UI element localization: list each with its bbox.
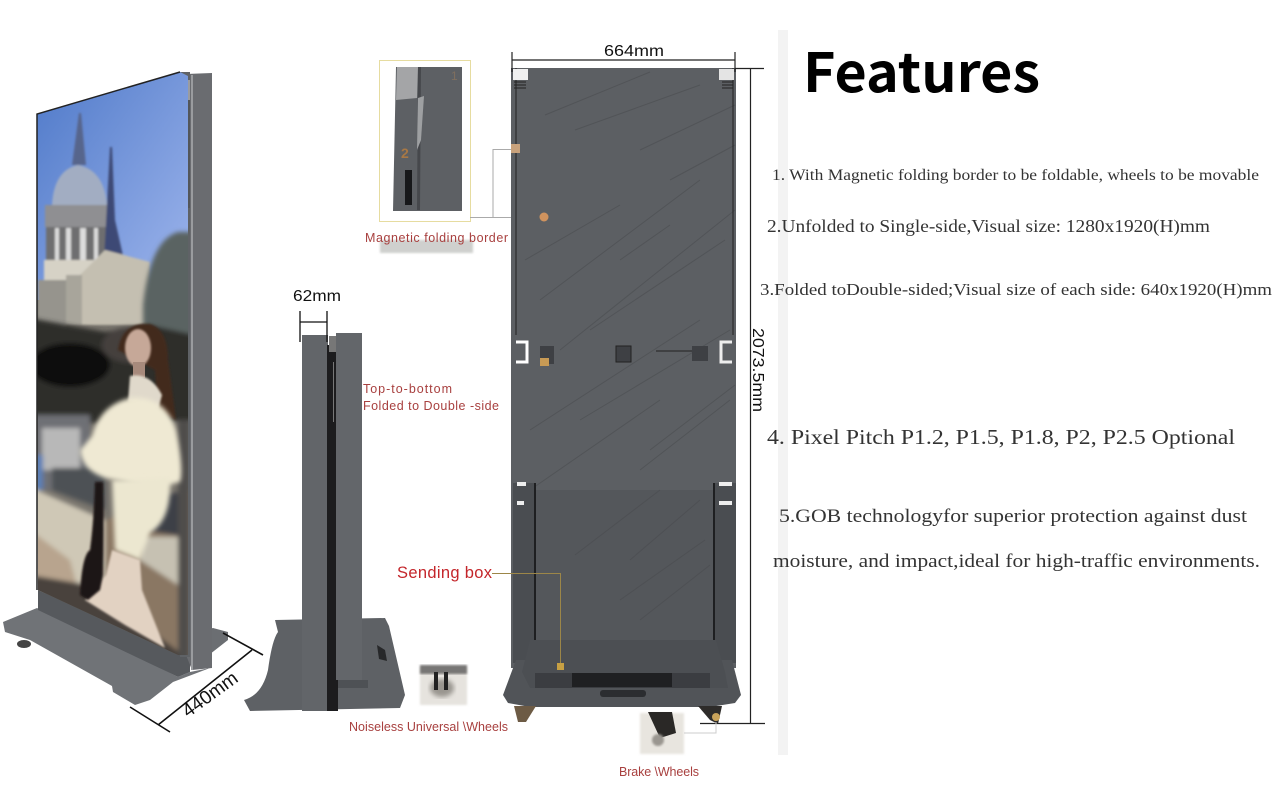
image: woman in fur coat — [80, 324, 181, 648]
image: cathedral — [38, 113, 150, 330]
lower recess — [535, 490, 715, 640]
dimension: 664mm — [512, 43, 735, 72]
title: Features — [803, 29, 1040, 108]
corner brackets — [513, 69, 734, 503]
side rear column — [302, 335, 328, 711]
side black strip — [327, 345, 338, 711]
rear brushed streaks — [525, 72, 735, 620]
label: folded — [363, 382, 499, 413]
side base — [244, 618, 405, 711]
left wheel — [514, 706, 536, 722]
connector lines — [470, 150, 544, 218]
screen edge — [37, 72, 180, 590]
side front column — [336, 333, 362, 680]
dimension: 2073.5mm: 2073.5mm — [749, 328, 766, 412]
base handle — [600, 690, 646, 697]
rear base — [503, 660, 741, 707]
inset: magnetic folding border: 2 — [401, 145, 409, 161]
inset: brake wheel — [640, 712, 716, 754]
label: folded: Folded to Double -side — [363, 399, 499, 413]
product: side view — [244, 288, 508, 734]
label: folded: Top-to-bottom — [363, 382, 452, 396]
screen image — [30, 70, 195, 660]
inset: magnetic folding border — [365, 60, 544, 253]
right foot flap — [205, 628, 228, 658]
dimension: 2073.5mm — [700, 68, 766, 724]
dimension: 664mm: 664mm — [604, 43, 664, 60]
feature 2: 2.Unfolded to Single-side,Visual size: 1280x1920(H)mm — [767, 216, 1210, 237]
product: rear view — [492, 43, 766, 724]
dimension: 62mm: 62mm — [293, 288, 341, 305]
feature 1: 1. With Magnetic folding border to be foldable, wheels to be movable — [772, 167, 1259, 184]
feature list: moisture, and impact,ideal for high-traffic environments. — [773, 551, 1260, 572]
left post — [513, 483, 535, 663]
rear column — [186, 73, 212, 670]
feature list — [760, 167, 1272, 572]
base plate — [3, 608, 210, 705]
feature 4: 4. Pixel Pitch P1.2, P1.5, P1.8, P2, P2.5 Optional — [767, 425, 1235, 449]
label: wheels: Noiseless Universal \Wheels — [349, 720, 508, 734]
rear panel — [511, 68, 736, 668]
base slot — [572, 673, 672, 687]
label: sending box: Sending box — [397, 564, 493, 582]
image: trees, water and pavement — [30, 232, 195, 660]
right wheel — [698, 706, 722, 724]
faint vertical divider band — [778, 30, 788, 755]
dimension: 62mm — [293, 288, 341, 342]
inset: universal wheels — [420, 665, 467, 705]
label: brake wheels: Brake \Wheels — [619, 765, 699, 779]
label: magnetic border: Magnetic folding border — [365, 231, 508, 245]
inset: magnetic folding border: 1 — [451, 69, 458, 83]
dimension: 440mm: 440mm — [179, 668, 242, 722]
dimension: 440mm — [130, 633, 263, 732]
callout markers — [492, 144, 720, 721]
product: angled front view with screen — [3, 70, 263, 732]
feature 3: 3.Folded toDouble-sided;Visual size of each side: 640x1920(H)mm — [760, 280, 1272, 299]
rear frame lines — [516, 68, 733, 335]
feature 5: 5.GOB technologyfor superior protection against dust — [779, 506, 1248, 527]
right post — [714, 483, 736, 663]
